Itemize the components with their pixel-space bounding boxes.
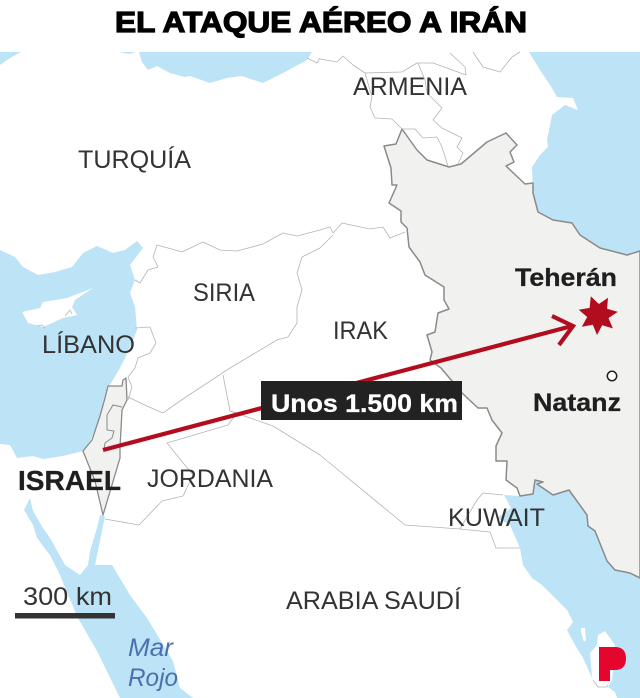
label: Líbano: LÍBANO xyxy=(42,330,135,359)
logo xyxy=(599,647,626,681)
country: Iran xyxy=(384,129,640,578)
label: Mar Rojo: Mar xyxy=(128,634,175,662)
label: Teherán: Teherán xyxy=(515,264,617,292)
sea: Red Sea xyxy=(24,498,193,698)
label: Jordania: JORDANIA xyxy=(147,465,273,493)
country: Israel xyxy=(83,378,127,515)
label: Siria: SIRIA xyxy=(193,279,255,307)
label: Mar Rojo: Rojo xyxy=(128,664,178,692)
callout: distance xyxy=(261,381,462,420)
label: Natanz: Natanz xyxy=(533,389,621,417)
label: Arabia Saudí: ARABIA SAUDÍ xyxy=(286,586,461,615)
arrow: Israel to Tehran xyxy=(103,316,573,450)
label: Irak: IRAK xyxy=(333,317,388,345)
label: Israel: ISRAEL xyxy=(18,465,121,496)
sea: Persian Gulf xyxy=(497,480,640,698)
sea: Mediterranean xyxy=(0,241,143,459)
label: Armenia: ARMENIA xyxy=(353,73,467,101)
scale bar xyxy=(15,583,115,618)
label: Kuwait: KUWAIT xyxy=(448,504,545,532)
icon: Natanz marker xyxy=(607,371,617,381)
territory border: West Bank xyxy=(104,405,122,450)
label: Turquía: TURQUÍA xyxy=(78,145,191,174)
scale bar: 300 km xyxy=(23,583,112,611)
title: EL ATAQUE AÉREO A IRÁN xyxy=(115,5,527,39)
sea: Black Sea xyxy=(0,52,312,83)
sea: Caspian Sea xyxy=(529,52,640,255)
label: Mar Rojo xyxy=(128,634,178,692)
callout: distance: Unos 1.500 km xyxy=(271,390,458,418)
island: Bahrain xyxy=(581,628,586,642)
icon: Tehran explosion star xyxy=(579,296,618,335)
